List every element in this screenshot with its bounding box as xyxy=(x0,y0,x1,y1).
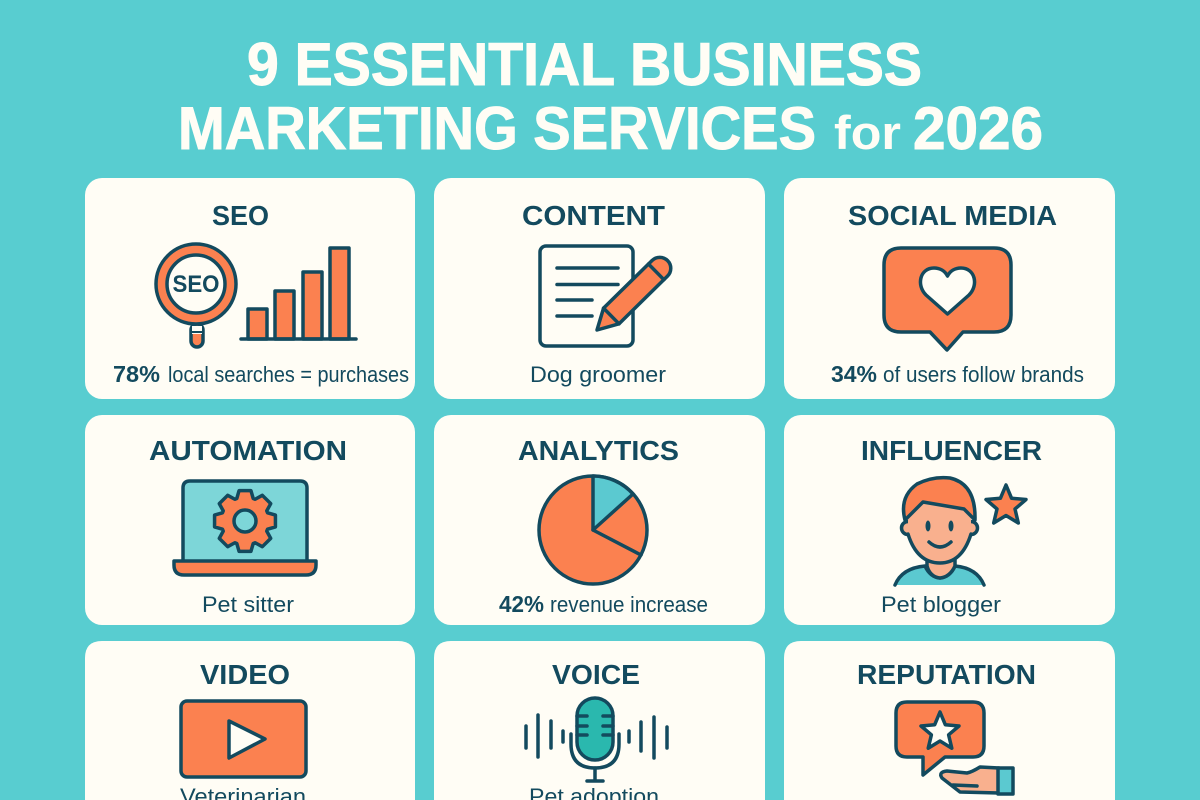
heading: Voice: VOICE xyxy=(552,659,640,690)
caption: Pet blogger xyxy=(881,592,1001,617)
stat text: local searches = purchases xyxy=(168,362,409,387)
heading: Influencer: INFLUENCER xyxy=(861,435,1042,466)
icon: open hand xyxy=(941,767,1013,794)
icon: magnifying glass: SEO xyxy=(172,271,220,298)
title: MARKETING SERVICES xyxy=(178,95,816,162)
bar chart xyxy=(241,248,356,339)
panel: Analytics xyxy=(434,415,765,625)
icon: review bubble with star xyxy=(896,702,984,775)
panel: SEO xyxy=(85,178,415,399)
title xyxy=(178,31,1043,162)
heading: Video: VIDEO xyxy=(200,659,290,690)
panel: Social Media xyxy=(784,178,1115,399)
stat text: revenue increase xyxy=(550,592,708,617)
heading: Automation: AUTOMATION xyxy=(149,435,347,466)
panel: Automation xyxy=(85,415,415,625)
stat text xyxy=(499,591,708,617)
stat text: of users follow brands xyxy=(883,362,1084,387)
heading: Social Media: SOCIAL MEDIA xyxy=(848,200,1057,231)
icon: person xyxy=(895,478,984,585)
panel: Influencer xyxy=(784,415,1115,625)
icon: speech bubble with heart xyxy=(884,248,1011,350)
stat text: 42% xyxy=(499,591,544,617)
icon: pencil xyxy=(589,253,675,338)
icon: gear xyxy=(215,491,275,551)
heading: Reputation: REPUTATION xyxy=(857,659,1036,690)
panel: Content xyxy=(434,178,765,399)
icon: magnifying glass xyxy=(156,244,236,347)
icon: star xyxy=(986,485,1026,523)
heading: Analytics: ANALYTICS xyxy=(518,435,679,466)
caption: Pet sitter xyxy=(202,592,294,617)
title: for xyxy=(834,106,901,159)
icon: microphone xyxy=(526,698,667,781)
heading: SEO: SEO xyxy=(212,200,269,231)
icon: video player xyxy=(181,701,306,777)
caption: Dog groomer xyxy=(530,362,666,387)
stat text: 34% xyxy=(831,361,877,387)
icon: document xyxy=(540,246,633,346)
stat text: 78% xyxy=(113,361,160,387)
panel: Voice xyxy=(434,641,765,800)
icon: laptop with gear xyxy=(174,481,316,575)
panel: Reputation xyxy=(784,641,1115,800)
title: 9 ESSENTIAL BUSINESS xyxy=(247,31,922,98)
title: 2026 xyxy=(913,95,1043,162)
pie chart xyxy=(539,476,647,584)
heading: Content: CONTENT xyxy=(522,200,665,231)
panel: Video xyxy=(85,641,415,800)
